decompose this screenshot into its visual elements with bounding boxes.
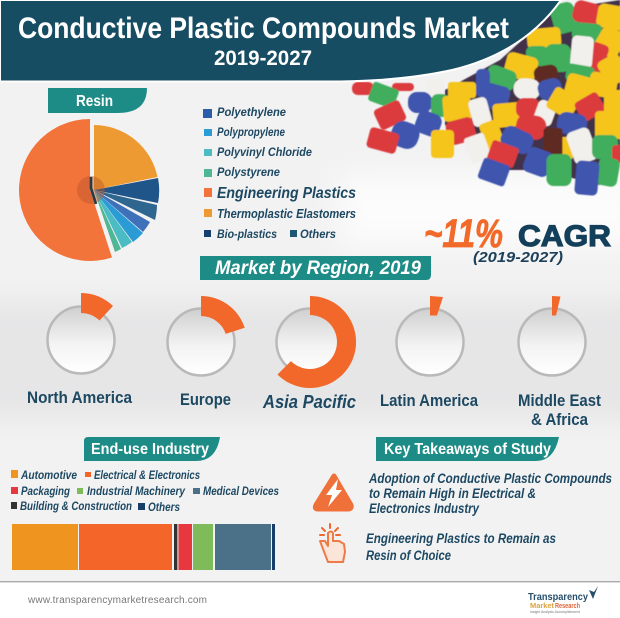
takeaway text 2: Engineering Plastics to Remain as [366,531,556,546]
takeaway text 2: Resin of Choice [366,548,451,563]
end-use legend: Industrial Machinery [87,486,186,498]
resin legend: Polyethylene [217,105,286,119]
logo: Market [530,601,554,610]
icon: warning triangle with lightning bolt [315,476,351,509]
resin heading: Resin [76,93,113,110]
heading: market by region: Market by Region, 2019 [215,258,421,279]
end-use legend: Medical Devices [203,486,279,498]
end-use legend: Packaging [21,486,70,498]
footer url: www.transparencymarketresearch.com [27,595,207,606]
header banner [0,0,561,82]
end-use heading [84,437,220,461]
resin legend: Others [300,227,336,241]
takeaway text 1: to Remain High in Electrical & [369,486,536,501]
end-use legend: Building & Construction [20,501,132,513]
takeaway text 2 [366,531,556,563]
ring: Asia Pacific: Asia Pacific [262,392,356,412]
end-use heading: End-use Industry [91,441,209,458]
logo: Insight Analysis Accomplishment [530,610,580,614]
ring: North America [27,293,133,407]
ring: Middle East and Africa: & Africa [531,411,589,429]
icon: hand pointer [320,524,345,562]
CAGR callout: CAGR [518,220,611,253]
takeaway text 1 [368,471,612,516]
logo: Research [555,601,580,610]
stacked bar chart [12,524,275,570]
panel: resin [19,88,356,261]
key takeaways heading [376,437,559,461]
resin legend [203,105,356,241]
ring: North America: North America [27,389,133,407]
resin legend: Polystyrene [217,165,280,179]
ring: Middle East and Africa: Middle East [518,392,601,410]
CAGR callout: ~11% [424,212,503,256]
title: Conductive Plastic Compounds Market [18,12,509,45]
pie chart [19,119,159,261]
end-use legend [11,470,279,514]
resin legend: Bio-plastics [217,227,277,241]
key takeaways heading: Key Takeaways of Study [384,441,551,458]
background [0,184,620,618]
ring: Europe: Europe [180,391,231,409]
end-use legend: Others [148,502,180,514]
resin legend: Engineering Plastics [217,185,356,202]
resin legend: Thermoplastic Elastomers [217,207,356,221]
ring: Middle East and Africa [518,296,601,429]
photo: coloured plastic pellets [352,0,620,196]
resin legend: Polyvinyl Chloride [217,145,312,159]
ring: Latin America: Latin America [380,392,479,410]
end-use legend: Automotive [20,470,78,482]
logo [528,586,598,614]
ring: Latin America [380,296,479,410]
ring: Asia Pacific [262,296,356,412]
panel: key takeaways [315,437,612,563]
takeaway text 1: Electronics Industry [369,501,480,516]
ring: Europe [168,296,245,409]
end-use legend: Electrical & Electronics [94,470,200,482]
panel: end-use industry [11,437,279,570]
CAGR callout: (2019-2027) [473,249,563,266]
logo: Transparency [528,591,588,603]
CAGR callout [424,212,611,266]
resin legend: Polypropylene [217,125,285,139]
title years: 2019-2027 [214,47,312,70]
resin heading [48,88,147,113]
